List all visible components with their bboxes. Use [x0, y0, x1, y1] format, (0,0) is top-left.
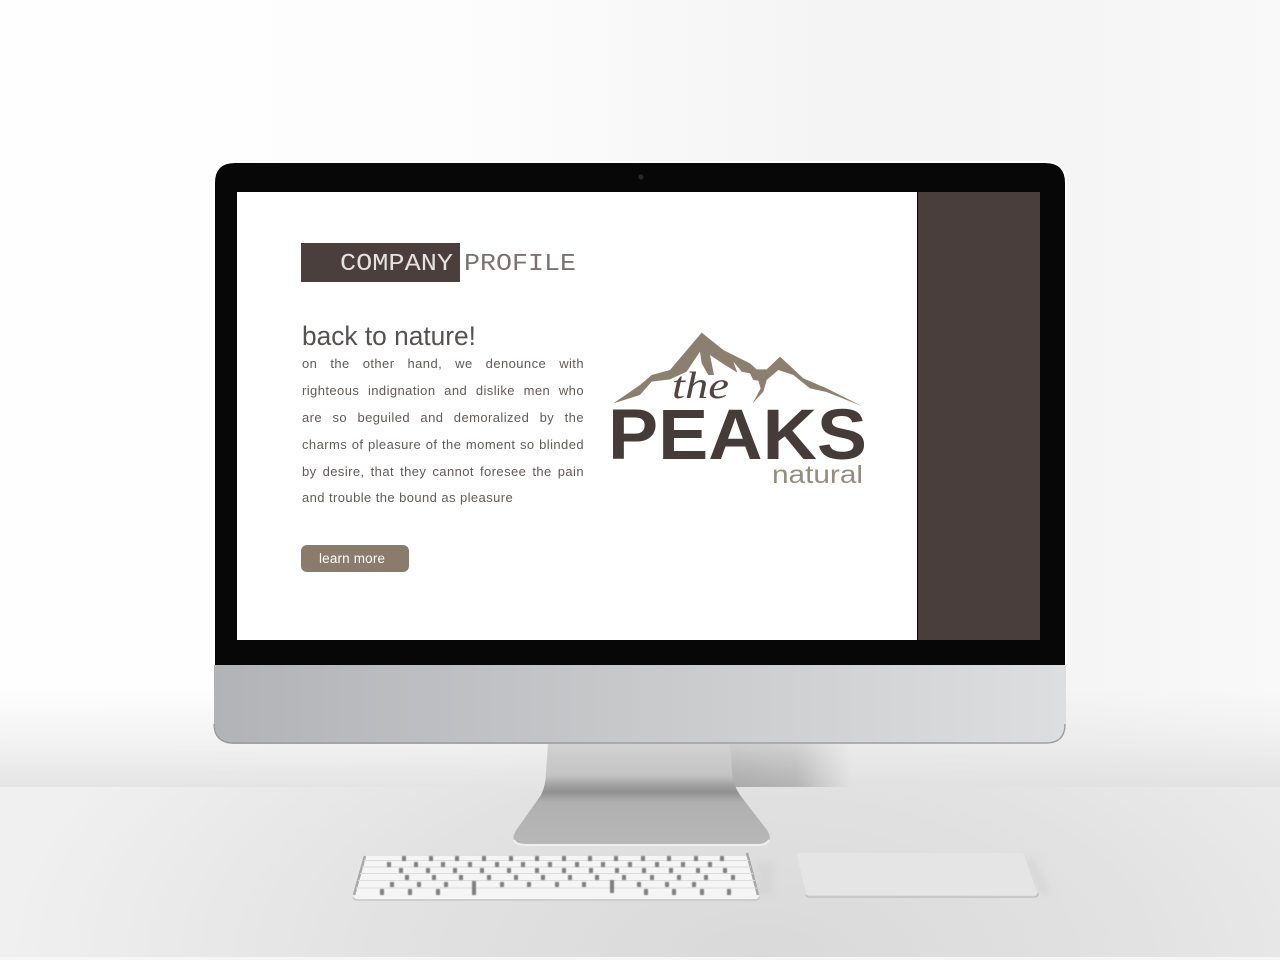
body paragraph: and trouble the bound as pleasure — [302, 490, 513, 505]
chin bottom edge — [214, 724, 1065, 743]
side panel — [918, 192, 1040, 640]
stand base edge — [514, 840, 769, 845]
wall lower shade — [0, 690, 1280, 787]
bottom edge — [0, 957, 1280, 960]
desk surface — [0, 787, 1280, 960]
heading: company profile — [301, 243, 576, 282]
keyboard side edges — [354, 853, 758, 895]
camera — [638, 174, 644, 180]
monitor shadow on wall — [730, 744, 850, 787]
keyboard — [353, 853, 773, 900]
keyboard row lines — [356, 860, 757, 888]
learn more button — [301, 545, 409, 572]
heading word: company: COMPANY — [340, 251, 453, 278]
heading block — [301, 243, 460, 282]
trackpad surface — [797, 853, 1037, 895]
trackpad shadow — [1022, 858, 1052, 895]
body paragraph: on the other hand, we denounce with — [302, 356, 584, 371]
learn more button: learn more — [319, 551, 385, 566]
screen — [237, 192, 917, 640]
monitor halo — [213, 161, 1067, 665]
monitor bezel — [215, 163, 1065, 665]
monitor stand — [513, 744, 770, 845]
logo word: the: the — [672, 365, 729, 407]
body paragraph: charms of pleasure of the moment so blinded — [302, 437, 584, 452]
body paragraph — [302, 356, 584, 505]
logo: the peaks natural — [608, 333, 867, 489]
subheading: back to nature! — [302, 321, 476, 351]
keyboard front edge — [353, 897, 759, 900]
body paragraph: righteous indignation and dislike men who — [302, 383, 584, 398]
heading word: profile: PROFILE — [464, 251, 576, 278]
keyboard body — [353, 856, 759, 899]
body paragraph: by desire, that they cannot foresee the pain — [302, 464, 584, 479]
stand silhouette — [513, 744, 770, 844]
logo word: natural: natural — [772, 461, 863, 489]
body paragraph: are so beguiled and demoralized by the — [302, 410, 584, 425]
monitor — [213, 161, 1067, 744]
logo word: peaks: PEAKS — [608, 396, 867, 475]
logo mountains — [613, 333, 862, 406]
trackpad — [797, 853, 1052, 897]
trackpad edge — [806, 893, 1038, 897]
monitor chin — [214, 665, 1066, 744]
keyboard key gaps — [380, 856, 735, 895]
keyboard shadow — [757, 862, 773, 896]
